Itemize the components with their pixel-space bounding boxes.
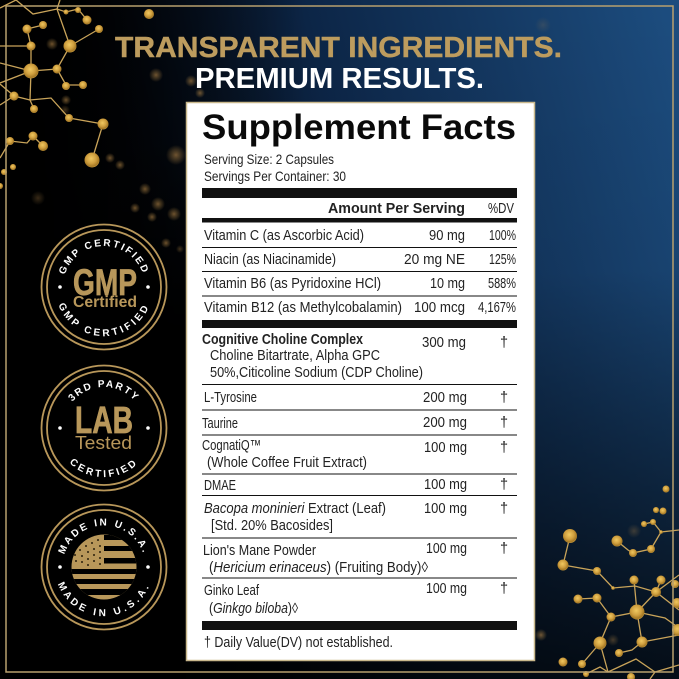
- ingredient rows: †: [500, 541, 508, 557]
- ingredient rows: 100 mg: [424, 477, 467, 493]
- ingredient rows: Ginko Leaf: [204, 583, 260, 599]
- badge: made in USA: MADE IN U.S.A.: [58, 518, 146, 554]
- thick rules and row dividers: [202, 188, 517, 630]
- panel: supplement facts: [186, 102, 534, 660]
- ingredient rows: 50%,Citicoline Sodium (CDP Choline): [210, 365, 423, 381]
- vitamin rows: 100%: [489, 228, 516, 244]
- ingredient rows: †: [500, 415, 508, 431]
- ingredient rows: (Ginkgo biloba)◊: [209, 601, 299, 617]
- vitamin rows: 90 mg: [429, 228, 465, 244]
- ingredient rows: †: [500, 335, 508, 351]
- vitamin rows: 100 mcg: [414, 300, 465, 316]
- badge: GMP certified: [40, 224, 168, 350]
- serving info: Servings Per Container: 30: [204, 168, 346, 184]
- badge: 3rd party lab tested: LAB: [75, 400, 133, 442]
- ingredient rows: Taurine: [202, 416, 238, 432]
- vitamin rows: 4,167%: [478, 300, 516, 316]
- footnote: † Daily Value(DV) not established.: [204, 635, 393, 651]
- molecule network: bottom right: [558, 486, 679, 679]
- ingredient rows: CognatiQ™: [202, 438, 261, 454]
- ingredient rows: L-Tyrosine: [204, 390, 257, 406]
- badge: 3rd party lab tested: Tested: [75, 433, 132, 453]
- vitamin rows: 20 mg NE: [404, 252, 465, 268]
- ingredient rows: 100 mg: [426, 541, 467, 557]
- vitamin rows: [204, 228, 516, 316]
- vitamin rows: Vitamin B6 (as Pyridoxine HCl): [204, 276, 381, 292]
- badge: made in USA: [40, 504, 168, 630]
- badge: 3rd party lab tested: [40, 364, 168, 492]
- ingredient rows: Cognitive Choline Complex: [202, 332, 363, 348]
- vitamin rows: 588%: [488, 276, 516, 292]
- vitamin rows: Niacin (as Niacinamide): [204, 252, 336, 268]
- column headers: %DV: [488, 201, 514, 217]
- ingredient rows: 200 mg: [423, 390, 467, 406]
- serving info: Serving Size: 2 Capsules: [204, 151, 334, 167]
- ingredient rows: 200 mg: [423, 415, 467, 431]
- badge: 3rd party lab tested: 3RD PARTY: [68, 380, 140, 401]
- serving info: [204, 151, 346, 184]
- ingredient rows: [202, 332, 508, 617]
- ingredient rows: (Hericium erinaceus) (Fruiting Body)◊: [209, 560, 429, 576]
- ingredient rows: Choline Bitartrate, Alpha GPC: [210, 348, 380, 364]
- vitamin rows: Vitamin B12 (as Methylcobalamin): [204, 300, 402, 316]
- badge: 3rd party lab tested: CERTIFIED: [70, 459, 136, 478]
- ingredient rows: 300 mg: [422, 335, 466, 351]
- ingredient rows: DMAE: [204, 478, 236, 494]
- heading line 2: PREMIUM RESULTS.: [195, 63, 484, 95]
- ingredient rows: †: [500, 440, 508, 456]
- vitamin rows: 125%: [489, 252, 516, 268]
- ingredient rows: †: [500, 390, 508, 406]
- badge: GMP certified: GMP CERTIFIED: [59, 303, 148, 336]
- badge: GMP certified: GMP CERTIFIED: [59, 239, 148, 274]
- ingredient rows: †: [500, 581, 508, 597]
- ingredient rows: [Std. 20% Bacosides]: [211, 518, 333, 534]
- badge: GMP certified: Certified: [73, 294, 137, 311]
- ingredient rows: †: [500, 501, 508, 517]
- vitamin rows: Vitamin C (as Ascorbic Acid): [204, 228, 364, 244]
- heading: [115, 32, 562, 95]
- ingredient rows: 100 mg: [426, 581, 467, 597]
- molecule network: top left: [0, 0, 154, 189]
- ingredient rows: †: [500, 477, 508, 493]
- column headers: Amount Per Serving: [328, 201, 465, 217]
- badge: made in USA: MADE IN U.S.A.: [58, 582, 149, 616]
- panel title: Supplement Facts: [202, 108, 516, 147]
- ingredient rows: Bacopa moninieri Extract (Leaf): [204, 501, 386, 517]
- ingredient rows: 100 mg: [424, 440, 467, 456]
- ingredient rows: Lion's Mane Powder: [203, 543, 316, 559]
- icon: flag: [71, 534, 138, 600]
- ingredient rows: 100 mg: [424, 501, 467, 517]
- heading line 1: TRANSPARENT INGREDIENTS.: [115, 32, 562, 64]
- ingredient rows: (Whole Coffee Fruit Extract): [207, 455, 367, 471]
- badge: GMP certified: GMP: [73, 262, 137, 303]
- vitamin rows: 10 mg: [430, 276, 465, 292]
